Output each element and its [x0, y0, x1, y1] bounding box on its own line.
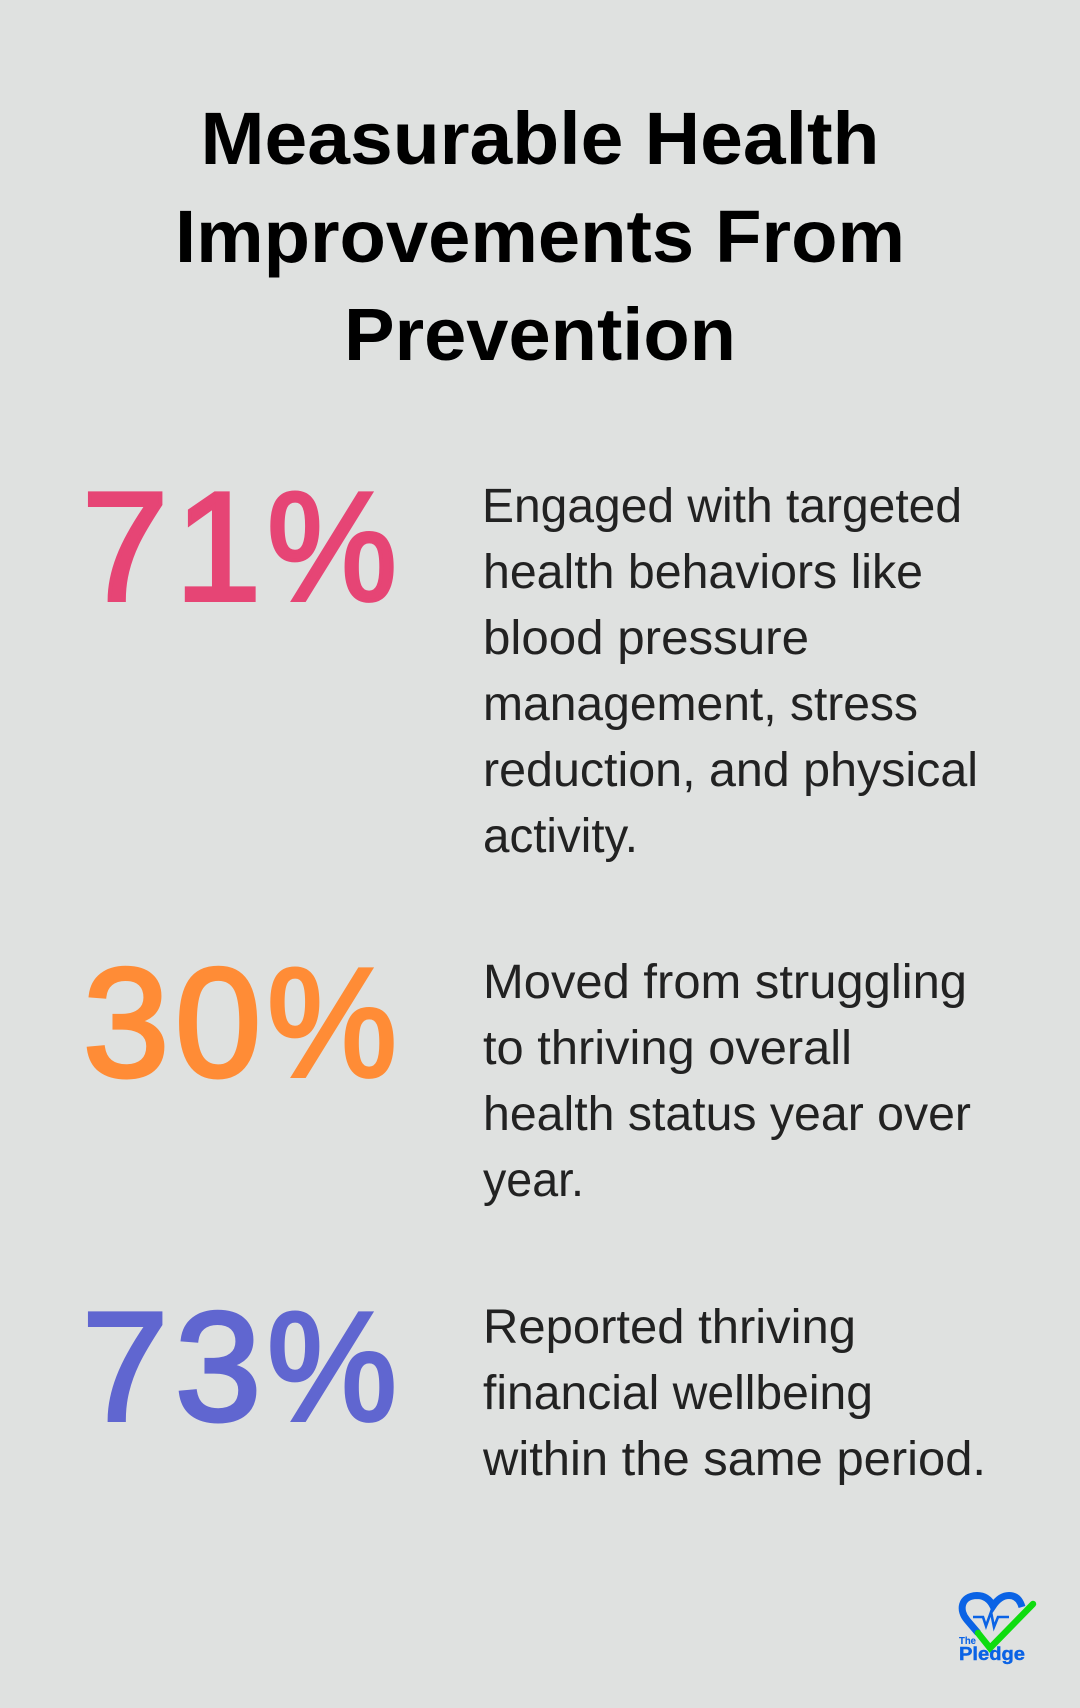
icon: pulse line	[973, 1612, 1009, 1627]
description: 73%	[482, 1301, 986, 1486]
number: 73%	[82, 1280, 397, 1453]
title: Improvements From	[175, 195, 905, 278]
description: 30%: Moved from struggling	[483, 956, 967, 1009]
description: 71%: Engaged with targeted	[482, 480, 962, 533]
title: Measurable Health	[200, 97, 880, 180]
description: 73%: within the same period.	[482, 1433, 986, 1486]
title	[175, 97, 905, 376]
description: 71%: blood pressure	[483, 612, 809, 665]
description: 30%: to thriving overall	[483, 1022, 852, 1075]
description: 73%: financial wellbeing	[483, 1367, 873, 1420]
description: 71%: management, stress	[483, 678, 918, 731]
description: 71%: activity.	[483, 810, 638, 863]
number: 73%: 73	[82, 1280, 261, 1453]
logo text: The	[959, 1636, 976, 1647]
description: 30%: year.	[483, 1154, 584, 1207]
description: 73%: Reported thriving	[483, 1301, 856, 1354]
title: Prevention	[344, 293, 736, 376]
description: 71%: reduction, and physical	[483, 744, 978, 797]
number: 71%: 71	[82, 460, 261, 633]
icon: heart outline	[962, 1596, 1022, 1633]
logo text: Pledge	[959, 1644, 1025, 1664]
number: 30%	[83, 936, 397, 1109]
description: 30%: health status year over	[483, 1088, 971, 1141]
logo text	[959, 1636, 1025, 1664]
stat: 73%	[82, 1280, 986, 1486]
number: 73%: %	[267, 1280, 397, 1453]
icon: check mark	[978, 1604, 1033, 1648]
number: 30%: 30	[83, 936, 261, 1109]
description: 71%	[482, 480, 978, 863]
description: 71%: health behaviors like	[483, 546, 923, 599]
description: 30%	[483, 956, 971, 1207]
stat: 30%	[83, 936, 971, 1207]
logo: The Pledge	[959, 1596, 1033, 1664]
number: 71%: %	[267, 460, 397, 633]
number: 71%	[82, 460, 397, 633]
stat: 71%	[82, 460, 978, 863]
number: 30%: %	[267, 936, 397, 1109]
